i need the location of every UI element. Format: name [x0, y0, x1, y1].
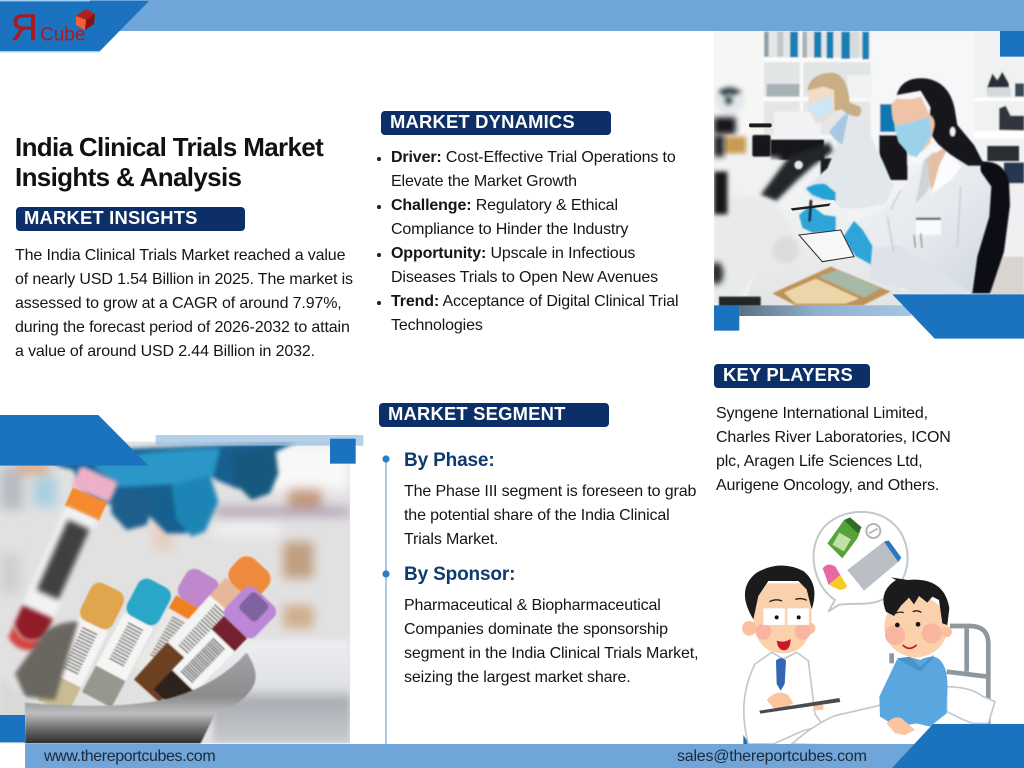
notebook — [791, 203, 831, 211]
text: by phase: the potential share of the India Clinical — [404, 507, 670, 524]
text: by sponsor: seizing the largest market share. — [404, 669, 631, 686]
text: market insights: of nearly USD 1.54 Billion in 2025. The market is — [15, 271, 353, 288]
logo banner — [0, 0, 149, 52]
heading: market dynamics: MARKET DYNAMICS — [390, 111, 575, 132]
wooden slide box — [772, 267, 891, 306]
email: sales@thereportcubes.com — [677, 748, 867, 765]
heading: market segment: MARKET SEGMENT — [388, 403, 566, 424]
challenge — [377, 197, 628, 238]
driver — [377, 149, 676, 190]
tube: purple back — [138, 568, 220, 668]
heading: market insights — [16, 207, 245, 231]
header band — [90, 0, 1024, 31]
chair — [971, 162, 1010, 293]
text: by sponsor: Companies dominate the sponsorship — [404, 621, 668, 638]
text: market insights: assessed to grow at a CAGR of around 7.97%, — [15, 295, 342, 312]
tube: cyan — [81, 575, 174, 708]
woman in background — [804, 73, 894, 208]
photo: lab scientists — [714, 31, 1024, 339]
doctor — [742, 566, 840, 745]
footer corner shape — [892, 724, 1024, 768]
desk — [748, 200, 962, 306]
tube: orange — [132, 551, 275, 704]
held tube — [2, 465, 119, 658]
speech bubble — [814, 512, 908, 612]
timeline — [382, 455, 390, 744]
driver: Elevate the Market Growth — [391, 173, 577, 190]
title: India Clinical Trials Market — [15, 132, 323, 162]
text: by phase — [404, 483, 696, 548]
text: by sponsor — [404, 597, 698, 686]
trend: Trend: Acceptance of Digital Clinical Trial — [391, 293, 678, 310]
text: market insights: during the forecast period of 2026-2032 to attain — [15, 319, 350, 336]
opportunity: Opportunity: Upscale in Infectious — [391, 245, 635, 262]
text: key players: plc, Aragen Life Sciences Ltd, — [716, 453, 923, 470]
opportunity: Diseases Trials to Open New Avenues — [391, 269, 658, 286]
text: key players: Syngene International Limited, — [716, 405, 928, 422]
driver: Driver: Cost-Effective Trial Operations to — [391, 149, 676, 166]
list: market dynamics — [377, 149, 678, 334]
main head — [891, 78, 985, 166]
pillow — [947, 687, 995, 723]
footer band — [25, 744, 925, 768]
text: key players — [716, 405, 951, 494]
bed sheet — [792, 696, 998, 747]
text: key players: Charles River Laboratories, ICON — [716, 429, 951, 446]
text: market insights — [15, 247, 353, 360]
text: market insights: The India Clinical Trials Market reached a value — [15, 247, 345, 264]
heading: market segment — [379, 403, 609, 427]
trend: Technologies — [391, 317, 483, 334]
text: by sponsor: Pharmaceutical & Biopharmaceutical — [404, 597, 661, 614]
main coat — [870, 148, 992, 294]
text: by sponsor: segment in the India Clinical Trials Market, — [404, 645, 698, 662]
gloves — [799, 200, 872, 264]
website: www.thereportcubes.com — [44, 748, 215, 765]
bowl — [0, 622, 256, 744]
title — [15, 132, 324, 192]
logo — [11, 7, 95, 46]
tube: purple front — [153, 585, 277, 700]
heading: key players: KEY PLAYERS — [723, 364, 853, 385]
patient bed — [892, 626, 988, 724]
text: market insights: a value of around USD 2.44 Billion in 2032. — [15, 343, 315, 360]
trend — [377, 293, 678, 334]
text: by phase: Trials Market. — [404, 531, 498, 548]
logo: Cube — [40, 24, 85, 46]
patient — [879, 577, 952, 735]
subheading: by phase: By Phase: — [404, 450, 495, 471]
title: Insights & Analysis — [15, 162, 241, 192]
heading: market insights: MARKET INSIGHTS — [24, 207, 198, 228]
text: key players: Aurigene Oncology, and Others. — [716, 477, 939, 494]
microscope blurred — [710, 117, 833, 306]
photo: blood sample tubes — [0, 415, 364, 744]
tube: yellow — [38, 582, 125, 706]
text: by phase: The Phase III segment is foreseen to grab — [404, 483, 696, 500]
challenge: Challenge: Regulatory & Ethical — [391, 197, 618, 214]
subheading: by sponsor: By Sponsor: — [404, 564, 515, 585]
illustration: doctor and patient — [742, 510, 996, 744]
challenge: Compliance to Hinder the Industry — [391, 221, 628, 238]
hand — [53, 442, 297, 537]
opportunity — [377, 245, 658, 286]
